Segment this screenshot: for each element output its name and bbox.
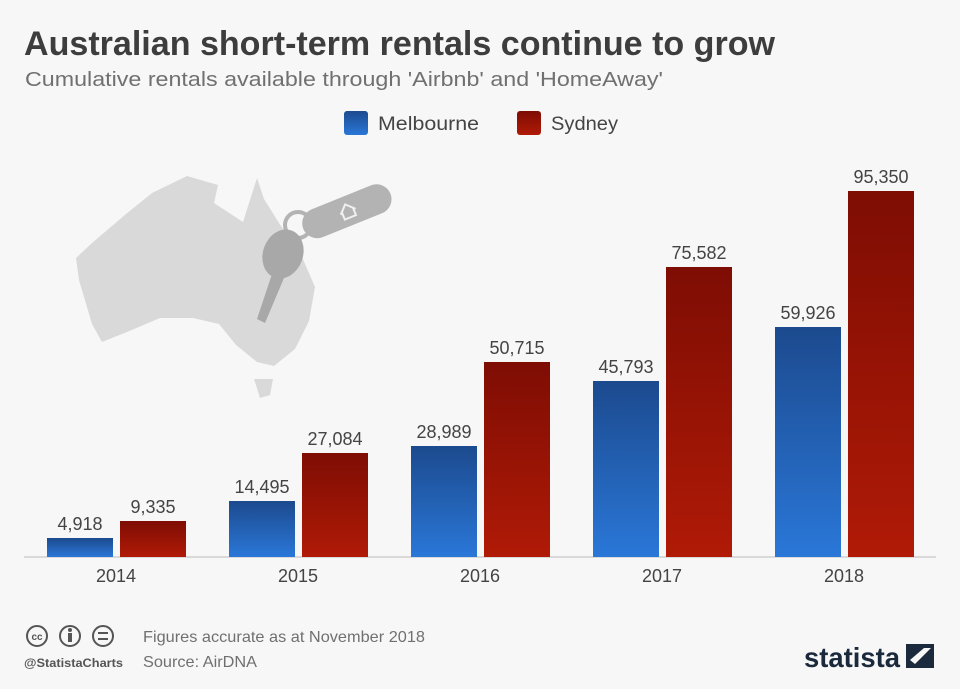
title: Australian short-term rentals continue to grow [24,25,776,63]
text: Source: AirDNA [143,654,257,671]
axis line [24,556,936,558]
footer: license icons [27,626,113,646]
footer: handle: @StatistaCharts [24,656,123,670]
bar chart: 4,918 [57,514,103,534]
x axis labels: 2017 [642,566,682,586]
bar chart: 75,582 [671,243,727,263]
legend: Sydney [551,114,619,135]
subtitle: Cumulative rentals available through 'Airbnb' and 'HomeAway' [25,69,663,91]
bar chart: 45,793 [598,357,654,377]
icon: australia map with key [76,176,396,398]
footer: license icons: cc [31,632,43,643]
bar chart: 50,715 [489,338,545,358]
x axis labels [96,566,864,586]
x axis labels: 2016 [460,566,500,586]
statista logo: statista [804,642,900,673]
footer: notes: Figures accurate as at November 2018 [143,629,425,646]
bar chart: 59,926 [780,303,836,323]
x axis labels: 2018 [824,566,864,586]
bar chart: 95,350 [853,167,909,187]
bar chart [47,167,914,557]
x axis labels: 2015 [278,566,318,586]
legend [344,111,619,135]
legend: Melbourne [378,114,479,135]
bar chart: 27,084 [307,429,363,449]
bar chart: 14,495 [234,477,290,497]
bar chart: 28,989 [416,422,472,442]
bar chart: 9,335 [130,497,176,517]
x axis labels: 2014 [96,566,136,586]
